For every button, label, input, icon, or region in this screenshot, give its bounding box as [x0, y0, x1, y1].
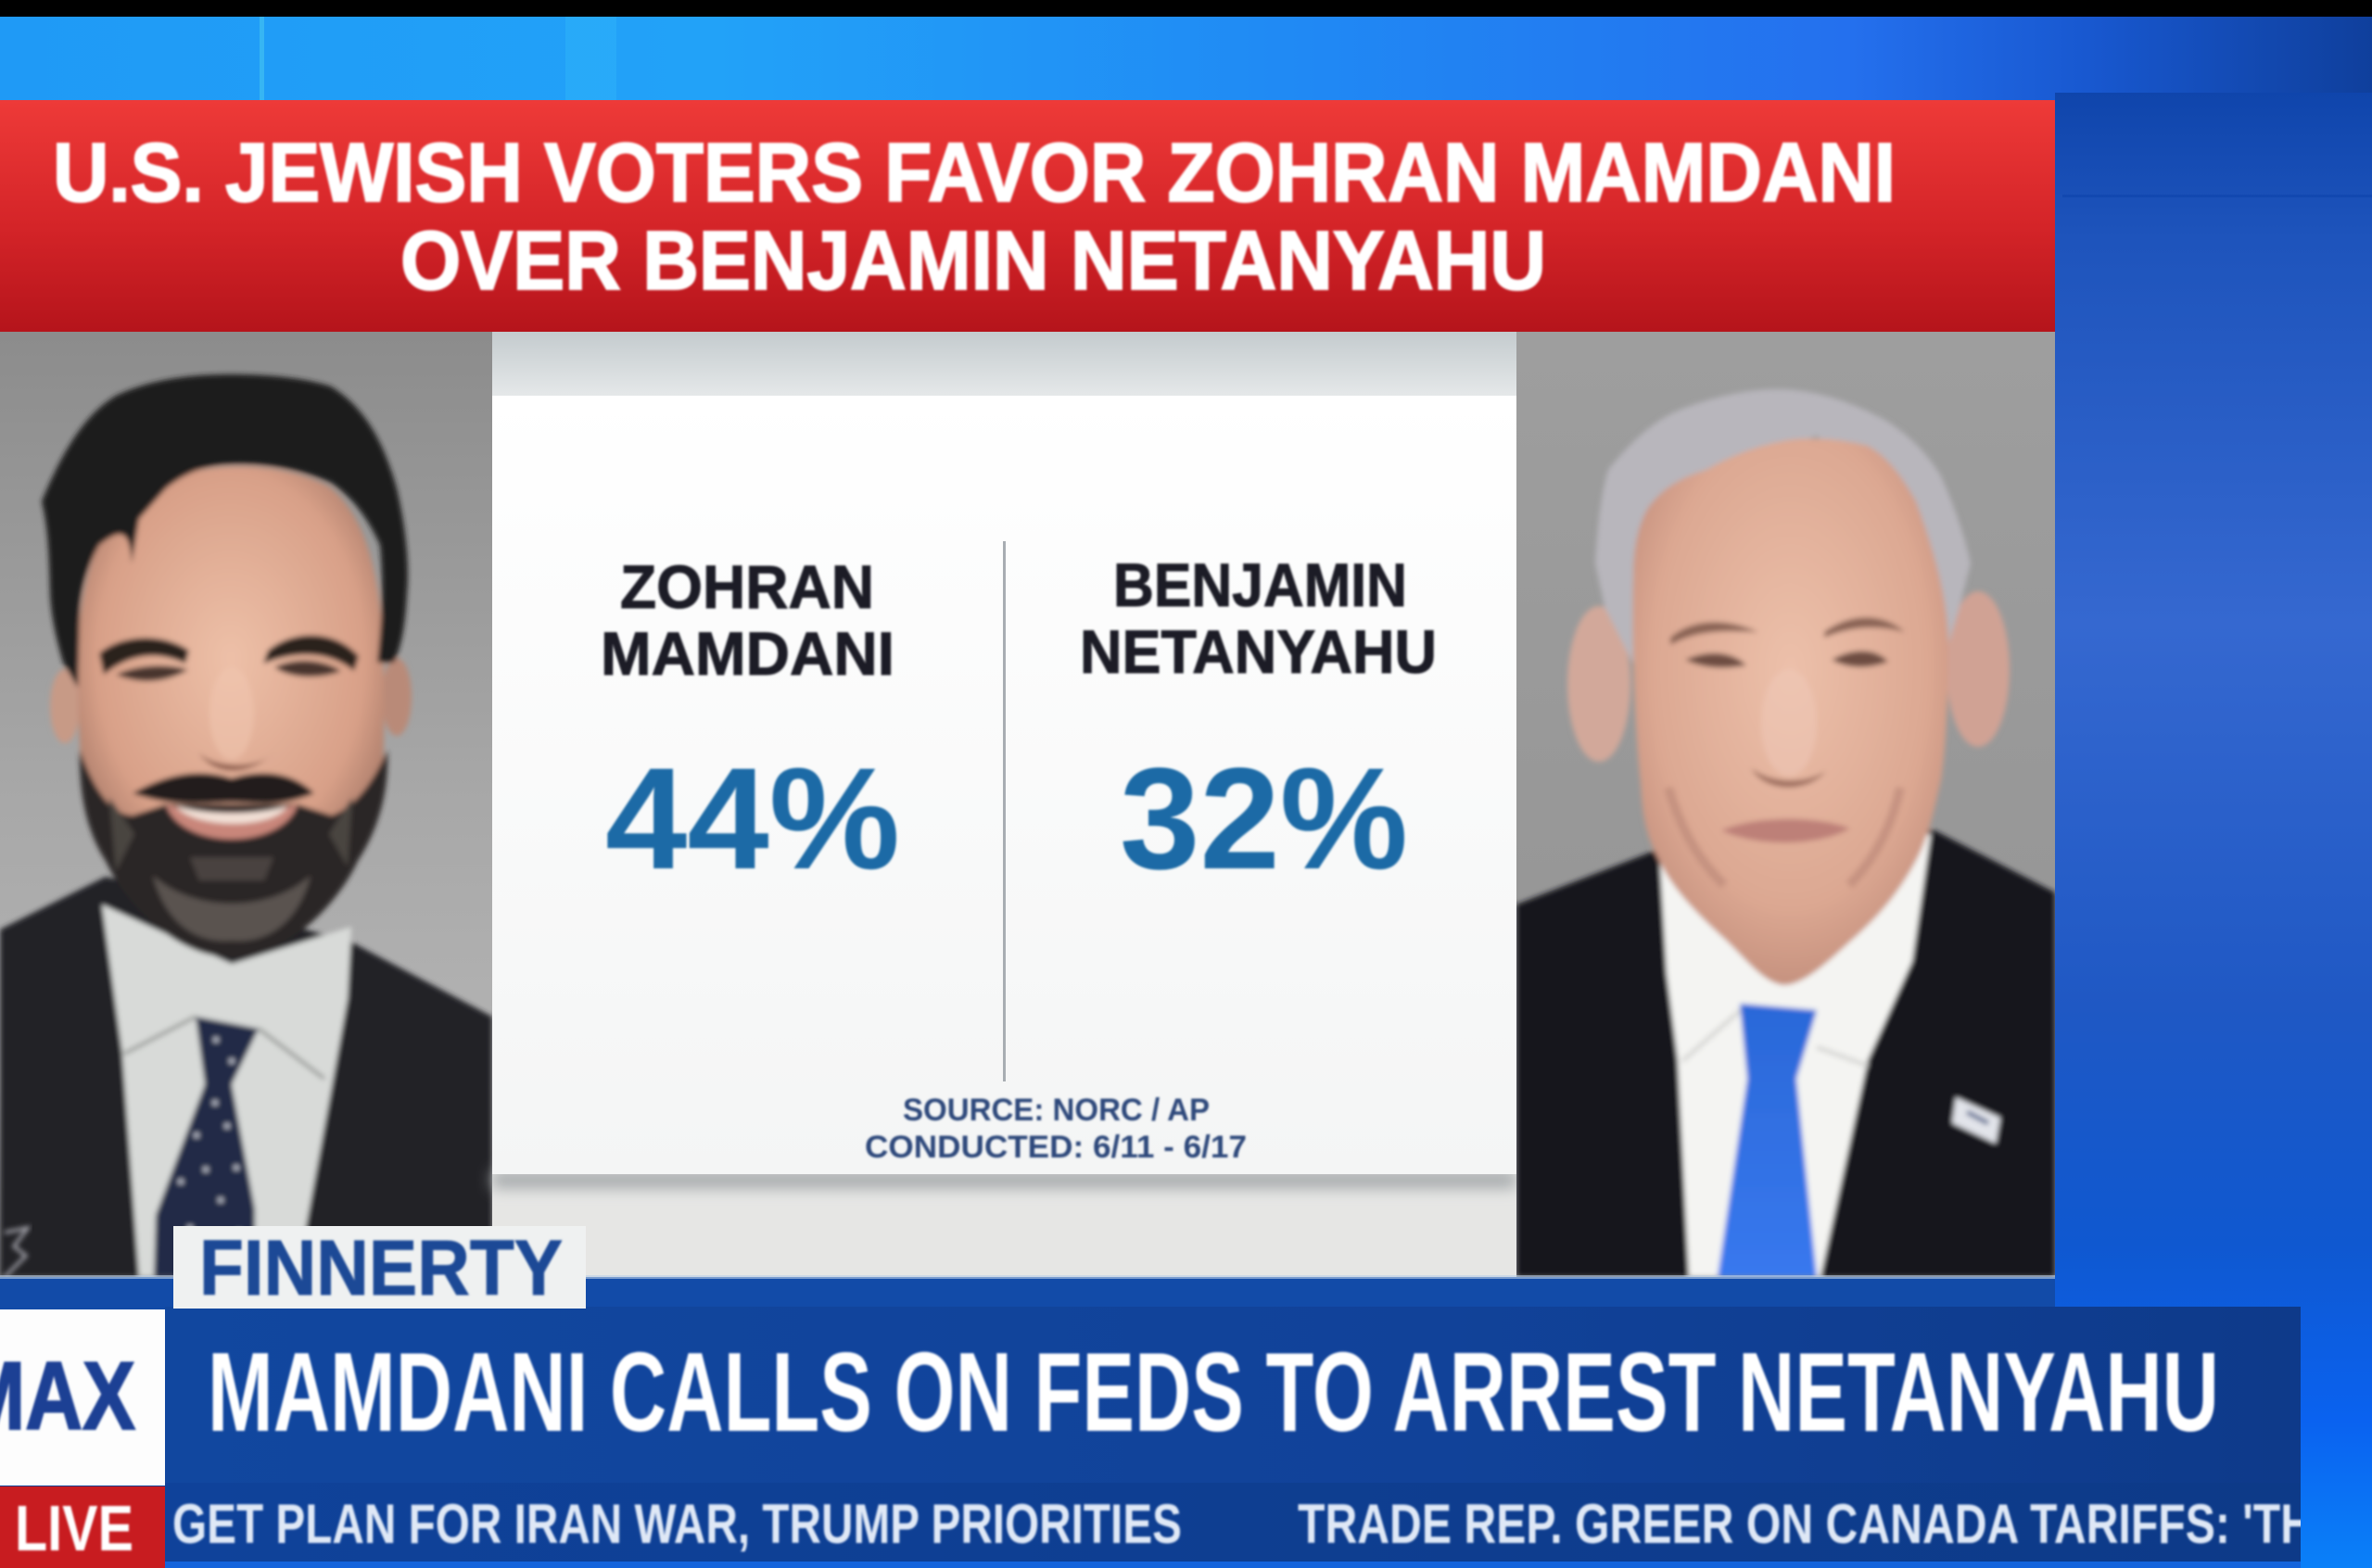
collar shadow [124, 1017, 324, 1079]
face [1632, 438, 1948, 985]
candidate: Mamdani: 44% [605, 739, 900, 900]
lapel mark [5, 1228, 28, 1277]
panel: poll results card [492, 332, 1516, 1277]
shirt [1659, 834, 1931, 1277]
suit [0, 877, 492, 1277]
hair [42, 374, 408, 688]
candidate: Netanyahu: 32% [1120, 739, 1408, 900]
source note [865, 1093, 1247, 1165]
panel: poll graphic headline banner [0, 100, 2055, 332]
nose [200, 754, 263, 774]
beard [80, 750, 387, 957]
cheek shading [1668, 788, 1900, 885]
network logo [0, 1309, 165, 1486]
panel: portrait of Zohran Mamdani [0, 332, 492, 1277]
source note: SOURCE: NORC / AP [903, 1093, 1210, 1128]
candidate: Netanyahu: BENJAMIN [1113, 550, 1407, 619]
live badge: LIVE [15, 1492, 133, 1564]
panel: lower third [0, 1224, 2313, 1568]
mouth [1721, 819, 1850, 842]
mustache and smile [133, 773, 314, 803]
candidate: Mamdani [601, 552, 900, 900]
lapel pin [1952, 1097, 2000, 1144]
candidate: Mamdani: MAMDANI [601, 619, 894, 688]
panel: portrait of Benjamin Netanyahu [1516, 332, 2055, 1277]
news ticker: GET PLAN FOR IRAN WAR, TRUMP PRIORITIES [172, 1493, 1182, 1555]
candidate: Netanyahu: NETANYAHU [1080, 617, 1437, 686]
suit [1516, 830, 2055, 1277]
brows and eyes [1670, 622, 1758, 645]
ears [1567, 606, 1630, 762]
collar shadow [1682, 1010, 1868, 1066]
news ticker [172, 1502, 2301, 1553]
hair [1595, 389, 1971, 675]
nose [1763, 675, 1815, 776]
shirt [102, 904, 351, 1277]
tie [1718, 1004, 1817, 1277]
face [72, 461, 387, 820]
heading: OVER BENJAMIN NETANYAHU [400, 215, 1546, 308]
tie [154, 1017, 259, 1277]
ears [50, 669, 80, 743]
candidate: Netanyahu [1080, 550, 1437, 900]
source note: CONDUCTED: 6/11 - 6/17 [865, 1130, 1247, 1165]
divider [1003, 541, 1006, 1081]
brows and eyes [99, 638, 189, 675]
reporter name tag: FINNERTY [199, 1224, 563, 1311]
heading [53, 127, 1896, 308]
candidate: Mamdani: ZOHRAN [620, 552, 874, 621]
heading: U.S. JEWISH VOTERS FAVOR ZOHRAN MAMDANI [53, 127, 1896, 220]
